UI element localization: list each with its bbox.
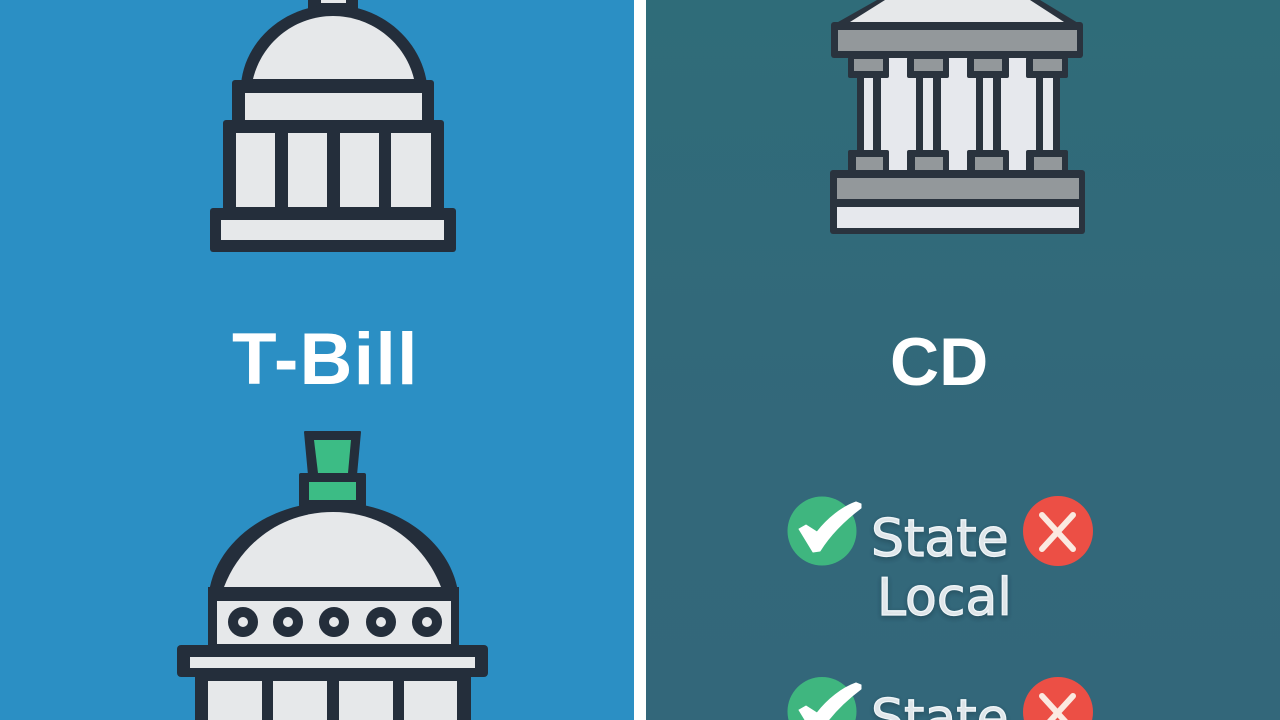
- icon: treasury capitol building, top: [210, 0, 456, 252]
- divider: [634, 0, 646, 720]
- icon: treasury capitol building with green lantern, bottom: [177, 432, 488, 720]
- heading: T-Bill: T-Bill: [232, 319, 419, 400]
- icon: red cross, lower: [1023, 677, 1093, 720]
- icon: bank building: [830, 0, 1085, 234]
- panel: CD: [646, 0, 1280, 720]
- icon: green check: [788, 496, 861, 566]
- panel: T-Bill: [0, 0, 634, 720]
- heading: CD: CD: [890, 324, 988, 400]
- tax row: state, repeated: [788, 677, 1093, 720]
- label: State: State: [871, 509, 1009, 569]
- tax row: state and local: [788, 496, 1093, 628]
- label: Local: Local: [877, 568, 1012, 628]
- icon: red cross: [1023, 496, 1093, 566]
- icon: green check, lower: [788, 677, 861, 720]
